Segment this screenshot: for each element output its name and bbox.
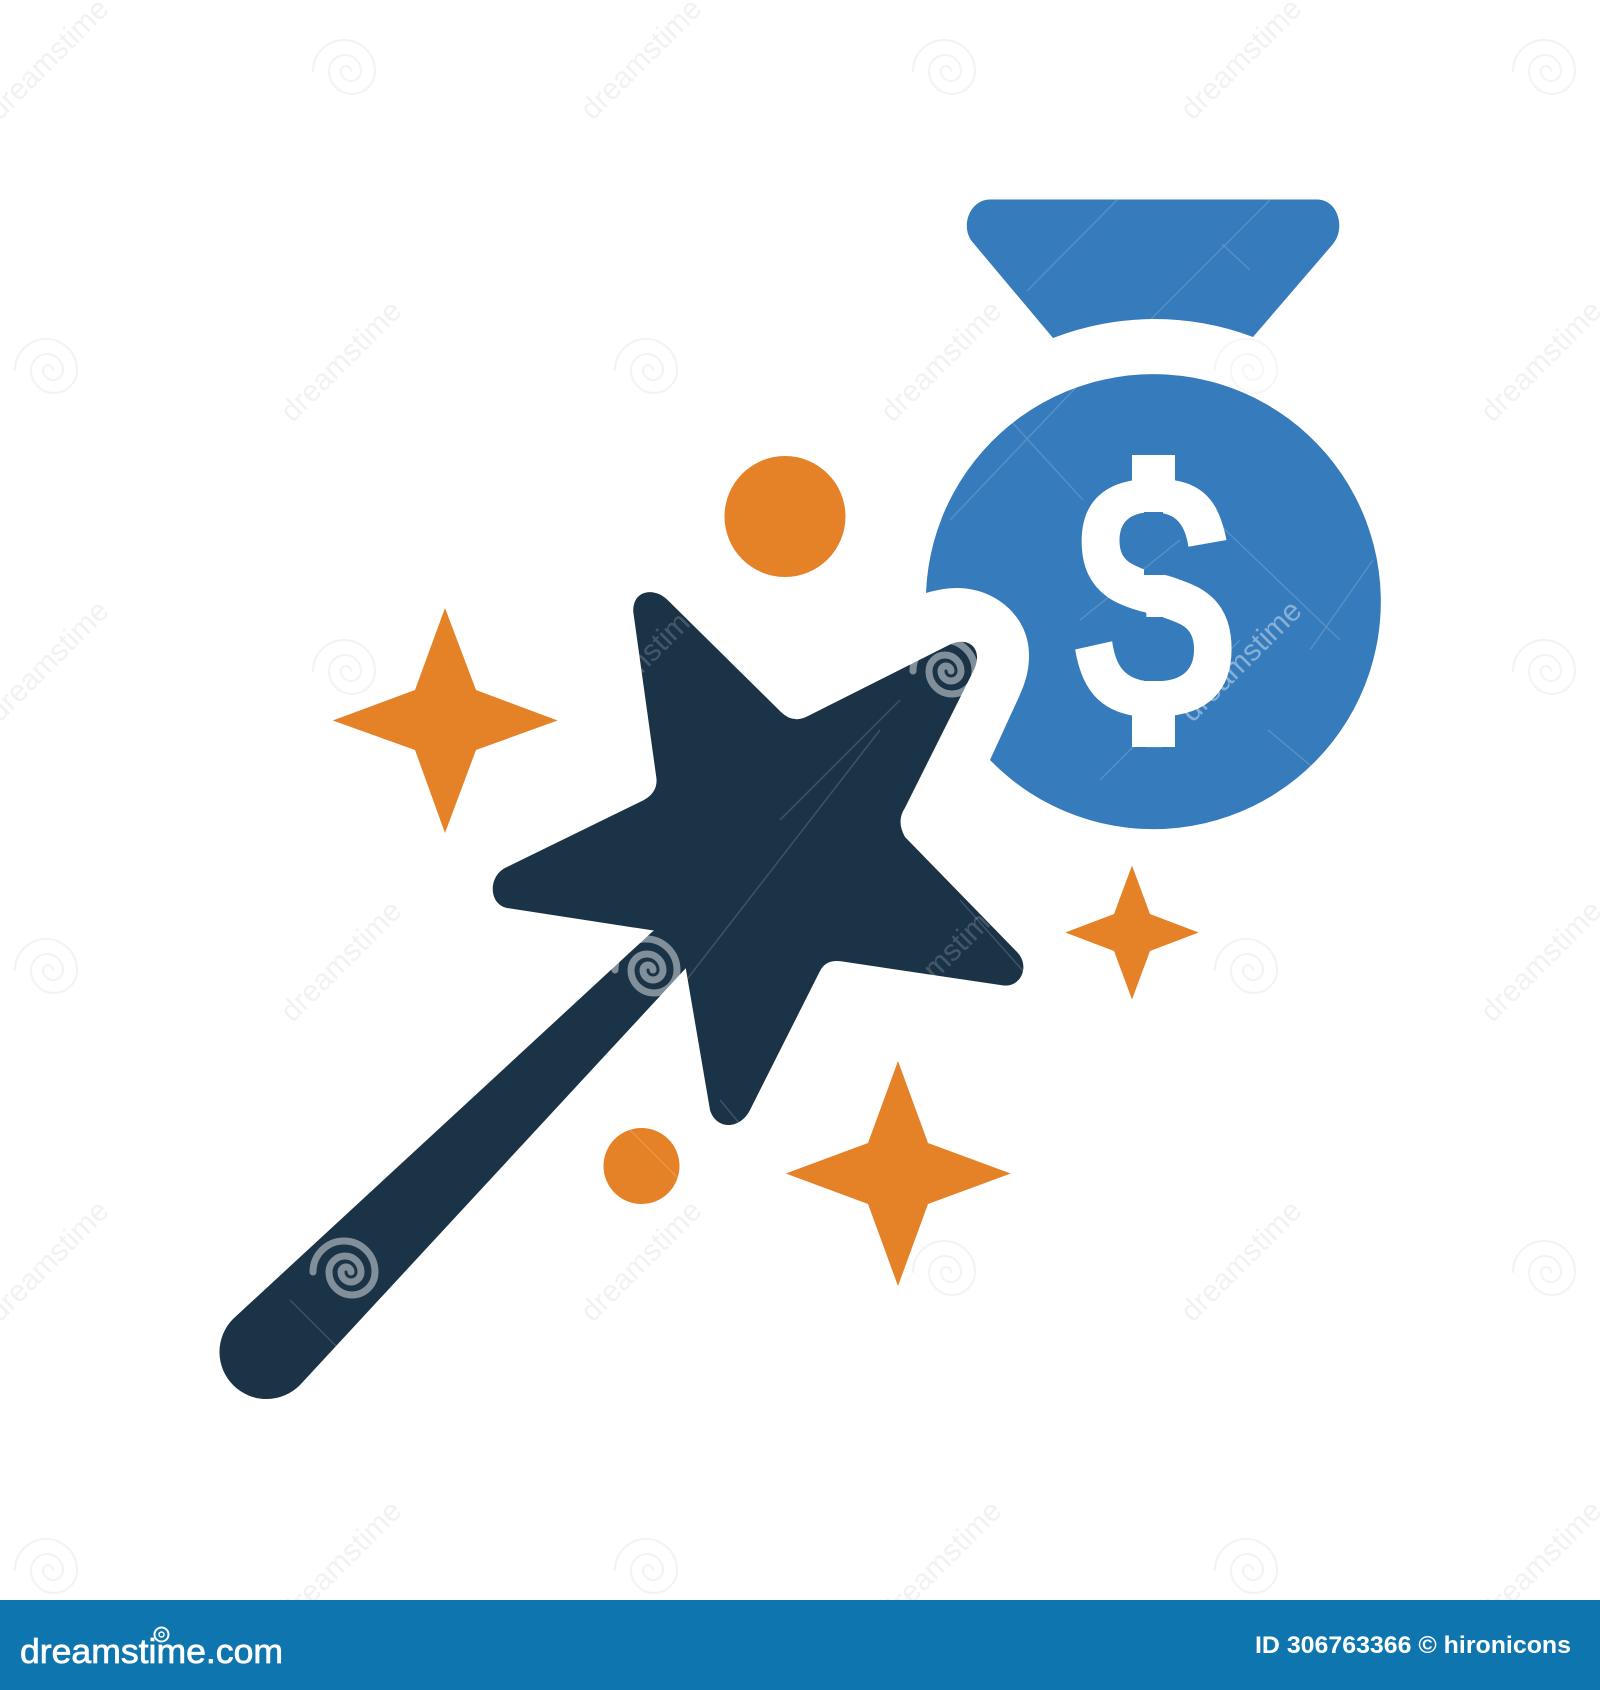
watermark layer on white background: dreamstime bbox=[874, 1494, 1008, 1628]
money bag knot bbox=[967, 200, 1339, 338]
icon: large orange dot bbox=[724, 456, 846, 577]
dollar sign: $ bbox=[1071, 398, 1236, 797]
money bag body bbox=[926, 374, 1381, 829]
icon: small orange dot bbox=[604, 1128, 680, 1204]
watermark layer on white background: dreamstime bbox=[1174, 1194, 1308, 1328]
watermark layer over the icon bbox=[290, 200, 1373, 1390]
footer bar bbox=[0, 1600, 1600, 1690]
icon: lower sparkle bbox=[786, 1061, 1011, 1286]
wand star bbox=[493, 592, 1023, 1125]
icon: magic wand bbox=[219, 592, 1023, 1399]
watermark layer on white background: dreamstime bbox=[874, 294, 1008, 428]
watermark layer on white background: dreamstime bbox=[274, 894, 408, 1028]
icon: small right sparkle bbox=[1065, 866, 1199, 1000]
watermark layer over the icon: dreamstime bbox=[1174, 594, 1308, 728]
watermark layer on white background: dreamstime bbox=[274, 1494, 408, 1628]
footer logo wordmark: dreamstime.com bbox=[20, 1633, 283, 1671]
wand shaft bbox=[219, 920, 700, 1399]
image id and credit: ID 306763366 © hironicons bbox=[1255, 1632, 1571, 1659]
icon: money bag bbox=[926, 200, 1381, 829]
watermark layer over the icon: dreamstime bbox=[574, 594, 708, 728]
watermark layer on white background: dreamstime bbox=[274, 294, 408, 428]
watermark layer over the icon: dreamstime bbox=[874, 894, 1008, 1028]
watermark layer on white background: dreamstime bbox=[574, 1194, 708, 1328]
icon: left sparkle bbox=[333, 608, 558, 833]
footer logo spiral bbox=[154, 1628, 168, 1642]
